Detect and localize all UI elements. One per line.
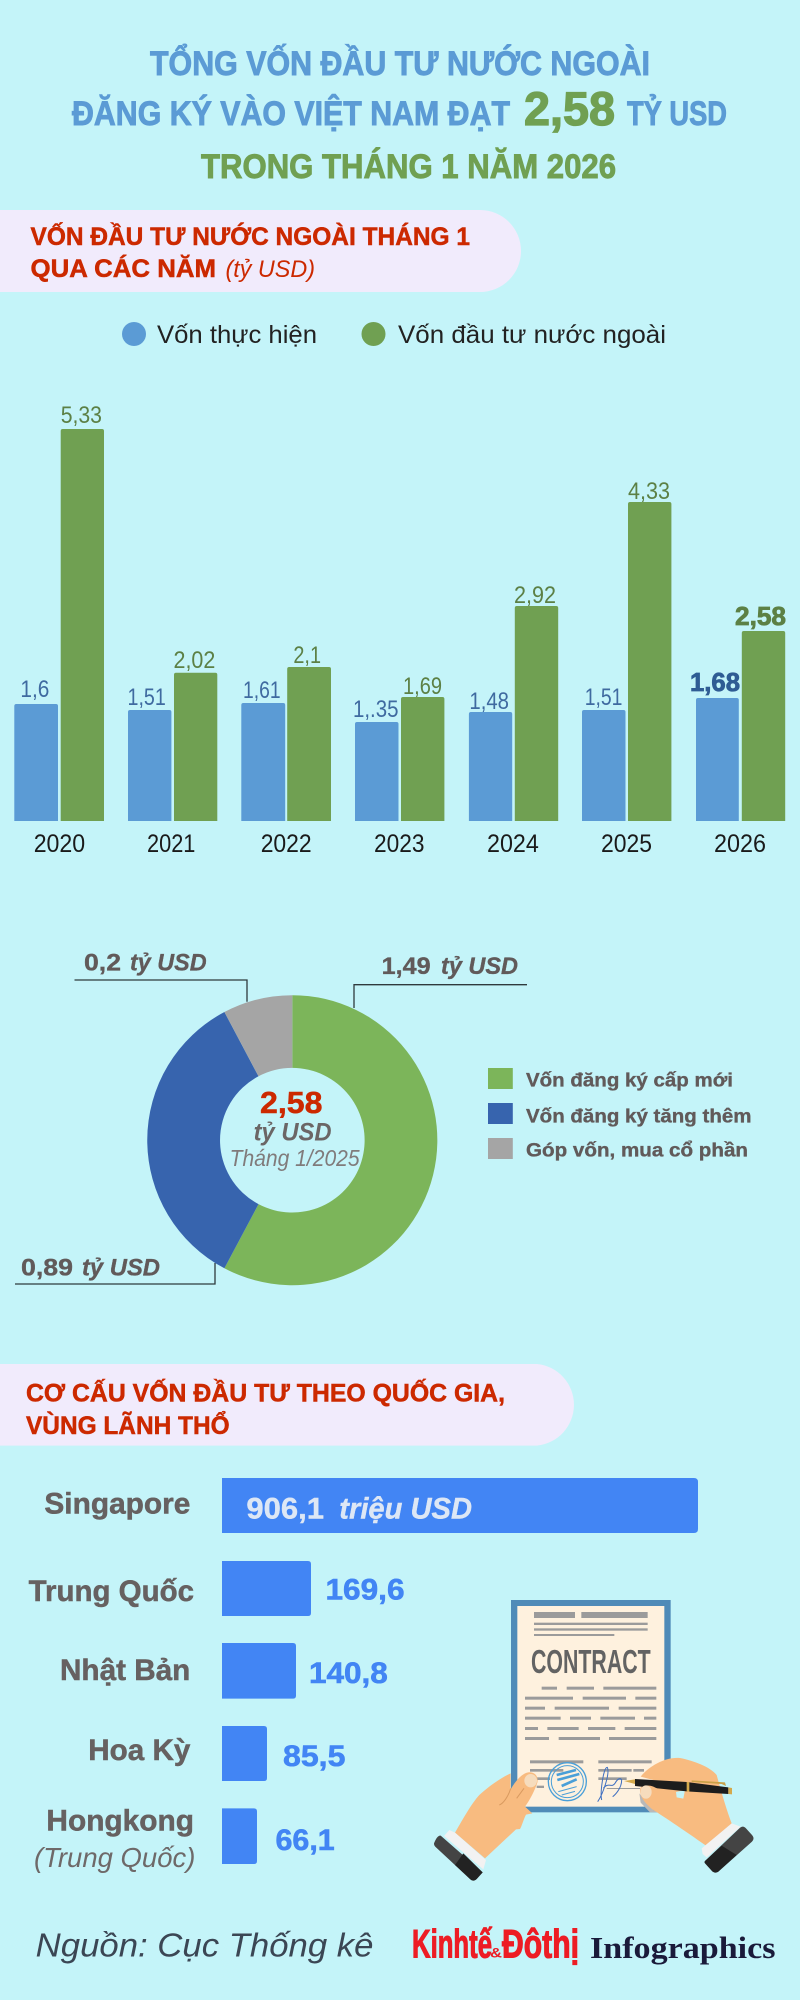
bars: 2026 (690, 601, 786, 858)
left hand (434, 1772, 538, 1881)
legend: bar chart: Vốn đầu tư nước ngoài (398, 321, 666, 349)
row: Hongkong: 66,1 (276, 1824, 335, 1857)
title: ĐĂNG KÝ VÀO VIỆT NAM ĐẠT (72, 95, 510, 133)
bars: 2023: 1,.35 (353, 696, 398, 723)
row: Hongkong: (Trung Quốc) (34, 1842, 195, 1873)
row: Hoa Kỳ (88, 1726, 345, 1781)
bar chart: capital by year (14, 402, 786, 858)
callout: 0,2 billion USD (74, 950, 247, 1002)
bars: 2020: 1,6 (20, 676, 49, 703)
panel: section heading by country: CƠ CẤU VỐN ĐẦU TƯ THEO QUỐC GIA, (26, 1377, 505, 1407)
panel: section heading by country: VÙNG LÃNH THỔ (26, 1410, 230, 1440)
segment: additional registered (147, 1012, 258, 1268)
legend: donut chart: Vốn đăng ký tăng thêm (526, 1107, 752, 1128)
title: TỶ USD (627, 95, 727, 133)
bars: 2023: 2023 (374, 830, 424, 858)
bars: 2022 (241, 642, 331, 858)
row: Nhật Bản (60, 1643, 388, 1699)
signature (598, 1767, 622, 1802)
bars: 2024: 1,48 (469, 688, 509, 715)
right hand with pen (624, 1758, 753, 1873)
bars: 2021: 2,02 (174, 647, 215, 674)
title: TỔNG VỐN ĐẦU TƯ NƯỚC NGOÀI (150, 44, 650, 83)
donut chart: capital structure (147, 995, 437, 1285)
bars: 2026: 2026 (714, 830, 766, 858)
title (72, 44, 727, 186)
panel: section heading foreign capital by year: QUA CÁC NĂM (30, 254, 216, 283)
panel: section heading foreign capital by year (0, 210, 521, 292)
donut centre total: tỷ USD (254, 1119, 332, 1147)
bars: 2021: 2021 (147, 830, 195, 858)
legend: donut chart: Vốn đăng ký cấp mới (526, 1071, 733, 1092)
bars: 2025 (582, 478, 671, 858)
bars: 2025: 1,51 (585, 684, 622, 711)
logo: Kinh te & Do thi Infographics: Infographics (590, 1930, 776, 1965)
legend: donut chart (488, 1068, 752, 1162)
bars: 2021: 1,51 (128, 684, 166, 711)
row: Singapore: triệu USD (339, 1492, 472, 1526)
bars: 2021 (128, 647, 217, 858)
bars: 2020: 2020 (34, 830, 85, 858)
bars: 2022: 2022 (261, 830, 312, 858)
segment: new registered (224, 995, 437, 1285)
panel: section heading foreign capital by year: (tỷ USD) (226, 256, 315, 283)
legend: bar chart: Vốn thực hiện (157, 321, 317, 349)
callout: 1,49 billion USD: tỷ USD (441, 953, 518, 980)
bars: 2022: 1,61 (243, 677, 281, 704)
bars: 2026: 1,68 (690, 667, 740, 697)
row: Hongkong (34, 1805, 335, 1873)
bars: 2020: 5,33 (61, 402, 102, 429)
bar chart: capital by country (29, 1478, 698, 1873)
segment: capital contribution (224, 995, 292, 1076)
title: TRONG THÁNG 1 NĂM 2026 (201, 148, 616, 186)
stamp (548, 1763, 586, 1801)
row: Trung Quốc: Trung Quốc (29, 1575, 194, 1608)
bars: 2025: 2025 (601, 830, 652, 858)
row: Singapore: 906,1 (246, 1492, 324, 1526)
logo: Kinh te & Do thi Infographics: & (490, 1944, 502, 1960)
callout: 1,49 billion USD: 1,49 (382, 953, 431, 980)
row: Trung Quốc: 169,6 (326, 1574, 404, 1607)
legend: bar chart (122, 321, 666, 349)
panel: section heading by country (0, 1364, 574, 1446)
row: Trung Quốc (29, 1561, 404, 1616)
callout: 0,89 billion USD (15, 1255, 215, 1284)
legend: donut chart: Góp vốn, mua cổ phần (526, 1141, 748, 1162)
bars: 2022: 2,1 (293, 642, 321, 669)
row: Singapore: Singapore (44, 1487, 190, 1520)
callout: 0,2 billion USD: tỷ USD (130, 950, 207, 977)
bars: 2025: 4,33 (628, 478, 670, 505)
row: Singapore (44, 1478, 698, 1533)
row: Nhật Bản: 140,8 (309, 1657, 388, 1690)
row: Hoa Kỳ: Hoa Kỳ (88, 1734, 191, 1767)
donut centre total (230, 1085, 360, 1171)
contract document (511, 1600, 671, 1812)
logo: Kinh te & Do thi Infographics: Đôthị (502, 1922, 579, 1966)
bars: 2023: 1,69 (403, 673, 442, 700)
title: 2,58 (524, 82, 615, 135)
bars: 2024: 2,92 (514, 582, 556, 609)
callout: 1,49 billion USD (354, 953, 527, 1008)
bars: 2020 (14, 402, 104, 858)
logo: Kinh te & Do thi Infographics: Kinhtế (412, 1922, 492, 1966)
bars: 2023 (353, 673, 444, 858)
donut centre total: Tháng 1/2025 (230, 1145, 360, 1171)
callout: 0,89 billion USD: tỷ USD (82, 1255, 160, 1282)
panel: section heading foreign capital by year: VỐN ĐẦU TƯ NƯỚC NGOÀI THÁNG 1 (30, 221, 470, 251)
callout: 0,2 billion USD: 0,2 (84, 950, 121, 977)
row: Hongkong: Hongkong (46, 1805, 194, 1838)
contract document: CONTRACT (531, 1644, 651, 1681)
logo: Kinh te & Do thi Infographics (412, 1922, 776, 1966)
illustration: hands signing contract (434, 1600, 753, 1881)
bars: 2026: 2,58 (735, 601, 786, 631)
row: Hoa Kỳ: 85,5 (283, 1740, 345, 1773)
donut centre total: 2,58 (260, 1085, 322, 1120)
callout: 0,89 billion USD: 0,89 (21, 1255, 73, 1282)
bars: 2024 (469, 582, 558, 858)
bars: 2024: 2024 (487, 830, 539, 858)
source note: Nguồn: Cục Thống kê (36, 1927, 373, 1964)
row: Nhật Bản: Nhật Bản (60, 1654, 190, 1687)
